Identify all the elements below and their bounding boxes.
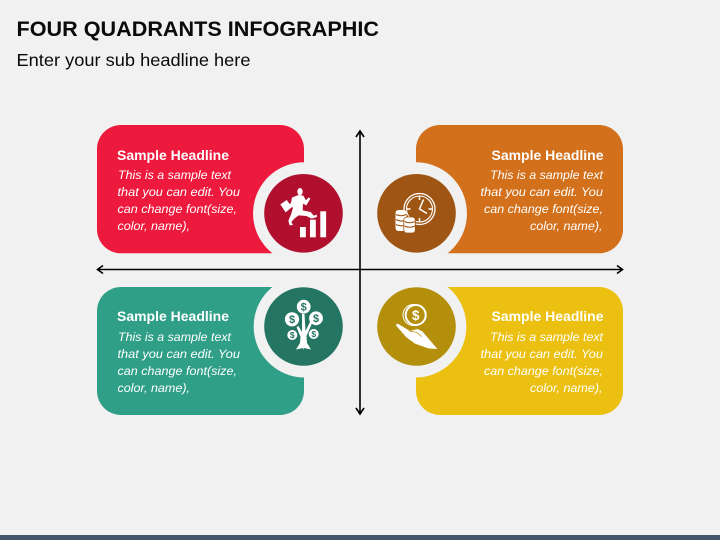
panel: bottom right yellow — [377, 287, 623, 415]
body text: that you can edit. You — [480, 347, 603, 361]
body text: This is a sample text — [118, 168, 232, 182]
icon: runner climbing bar chart — [264, 174, 343, 253]
body text: color, name), — [530, 219, 602, 233]
horizontal double-headed axis arrow — [98, 266, 622, 274]
card shape — [416, 125, 623, 253]
body text: color, name), — [118, 381, 190, 395]
heading: Sample Headline — [492, 148, 604, 163]
icon: money tree: $ — [289, 314, 295, 326]
body text — [118, 330, 240, 395]
body text: This is a sample text — [118, 330, 232, 344]
icon: hand holding coin: $ — [412, 308, 420, 323]
heading: Sample Headline — [117, 148, 230, 163]
icon: money tree: $ — [290, 330, 295, 340]
heading: Sample Headline — [117, 309, 230, 324]
subtitle: Enter your sub headline here — [16, 50, 250, 70]
body text: can change font(size, — [484, 364, 603, 378]
icon: hand holding coin — [377, 287, 456, 366]
body text — [118, 168, 240, 233]
card shape — [97, 125, 304, 253]
vertical double-headed axis arrow — [356, 131, 364, 414]
card shape — [416, 287, 623, 415]
body text: can change font(size, — [118, 364, 237, 378]
body text: This is a sample text — [490, 168, 604, 182]
panel: bottom left teal — [97, 287, 343, 415]
icon: money tree — [264, 287, 343, 366]
icon: money tree: $ — [313, 313, 319, 325]
icon: clock and coins — [377, 174, 456, 253]
body text: color, name), — [530, 381, 602, 395]
icon: money tree: $ — [301, 302, 307, 314]
footer bar — [0, 535, 720, 540]
body text: This is a sample text — [490, 330, 604, 344]
body text: that you can edit. You — [480, 185, 603, 199]
body text: color, name), — [118, 219, 190, 233]
body text: can change font(size, — [118, 202, 237, 216]
body text: can change font(size, — [484, 202, 603, 216]
panel: top left red — [97, 125, 343, 253]
icon: money tree: $ — [311, 329, 316, 339]
panel: top right orange — [377, 125, 623, 253]
body text — [480, 330, 604, 395]
body text: that you can edit. You — [118, 185, 240, 199]
body text — [480, 168, 604, 233]
card shape — [97, 287, 304, 415]
title: FOUR QUADRANTS INFOGRAPHIC — [16, 17, 379, 41]
heading: Sample Headline — [492, 309, 604, 324]
body text: that you can edit. You — [118, 347, 240, 361]
